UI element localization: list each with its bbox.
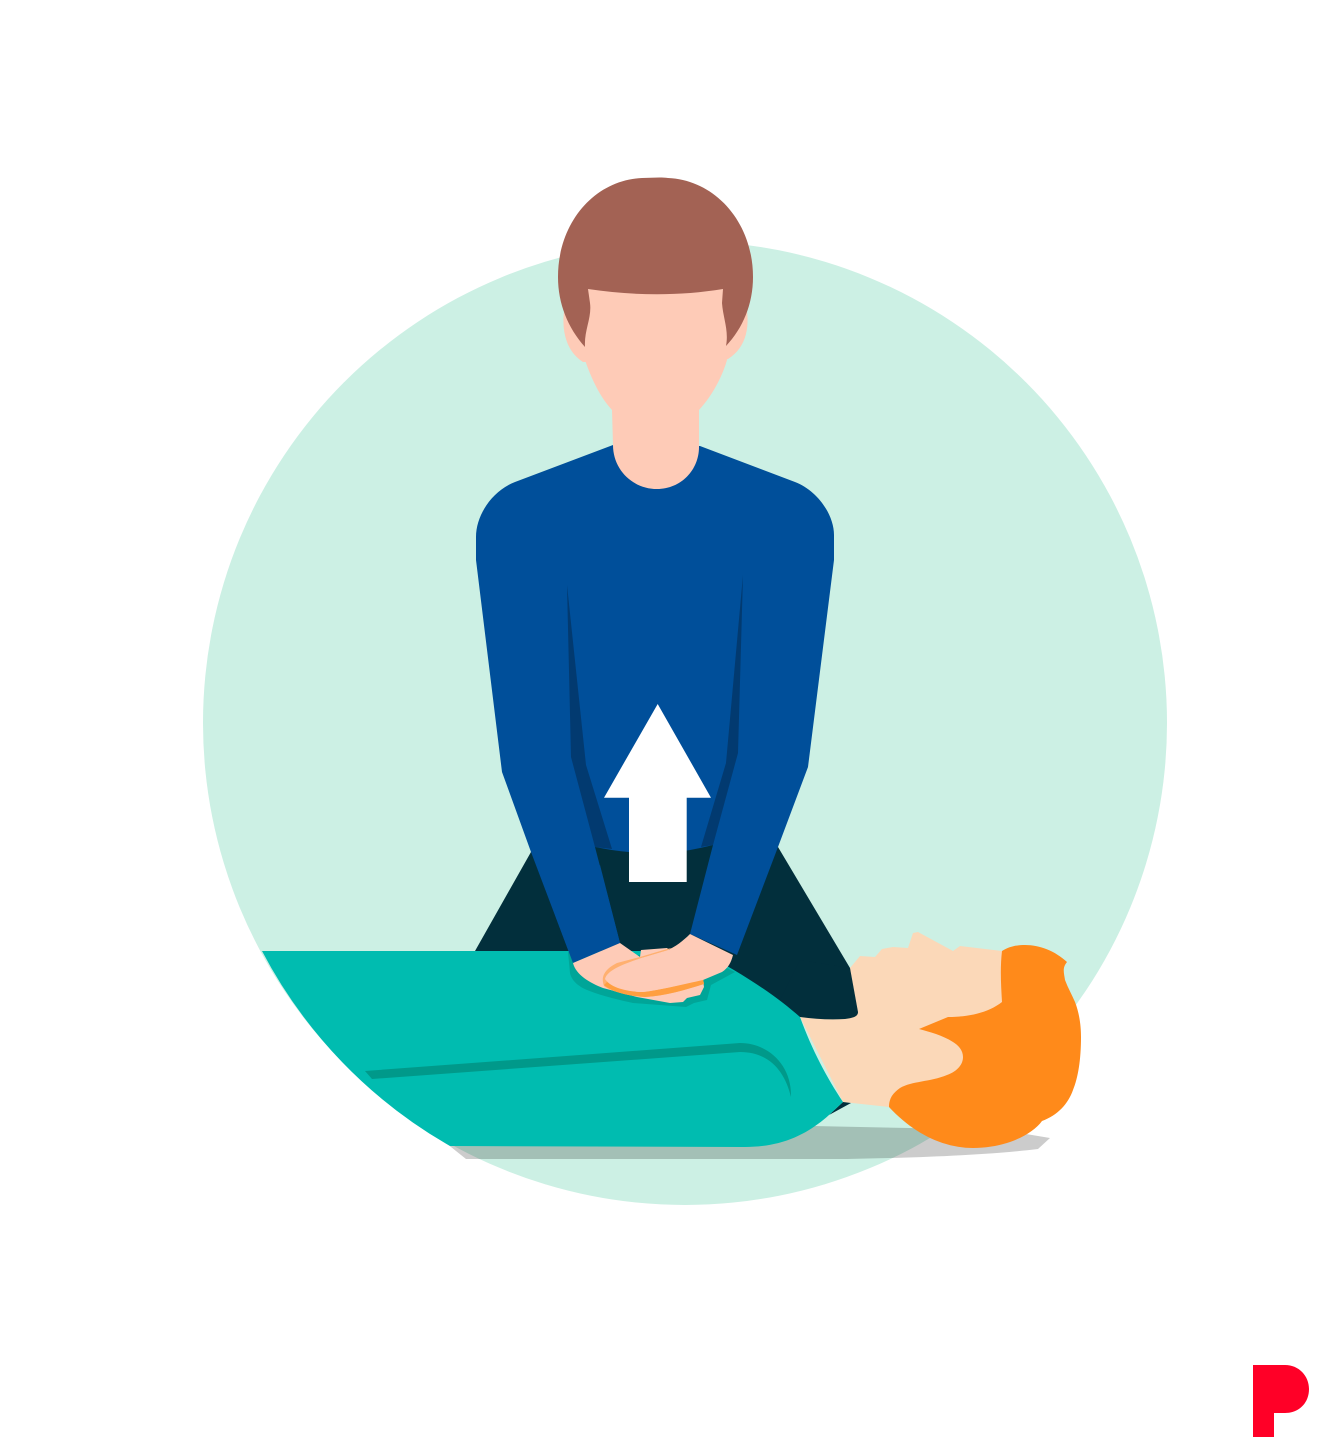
patient collar shadow <box>829 1102 851 1115</box>
rescuer <box>475 178 858 1019</box>
patient <box>262 932 1081 1148</box>
sleeve shadow left <box>567 585 612 849</box>
sleeve shadow right <box>701 575 743 847</box>
rescuer torso and arms <box>476 445 834 963</box>
patient hair <box>889 945 1081 1148</box>
upward arrow <box>604 704 711 882</box>
rescuer legs <box>475 845 858 1019</box>
patient arm fold <box>365 1043 791 1097</box>
logo: red P <box>1253 1365 1309 1437</box>
background circle <box>203 241 1167 1205</box>
left sleeve cuff <box>555 865 620 963</box>
hand edge highlight <box>603 948 704 997</box>
patient body <box>262 951 843 1147</box>
ground shadow <box>441 1126 1050 1159</box>
rescuer hands <box>573 934 733 1003</box>
hand shadow on chest <box>568 952 735 1007</box>
patient leg overlap <box>780 960 858 1019</box>
front hand <box>606 934 733 992</box>
lower hand edge stripe <box>604 979 704 997</box>
rescuer hair <box>558 178 753 347</box>
patient face and neck <box>800 932 1002 1107</box>
back hand <box>573 943 704 1003</box>
rescuer neck and face <box>585 285 727 489</box>
rescuer ears <box>563 300 748 362</box>
